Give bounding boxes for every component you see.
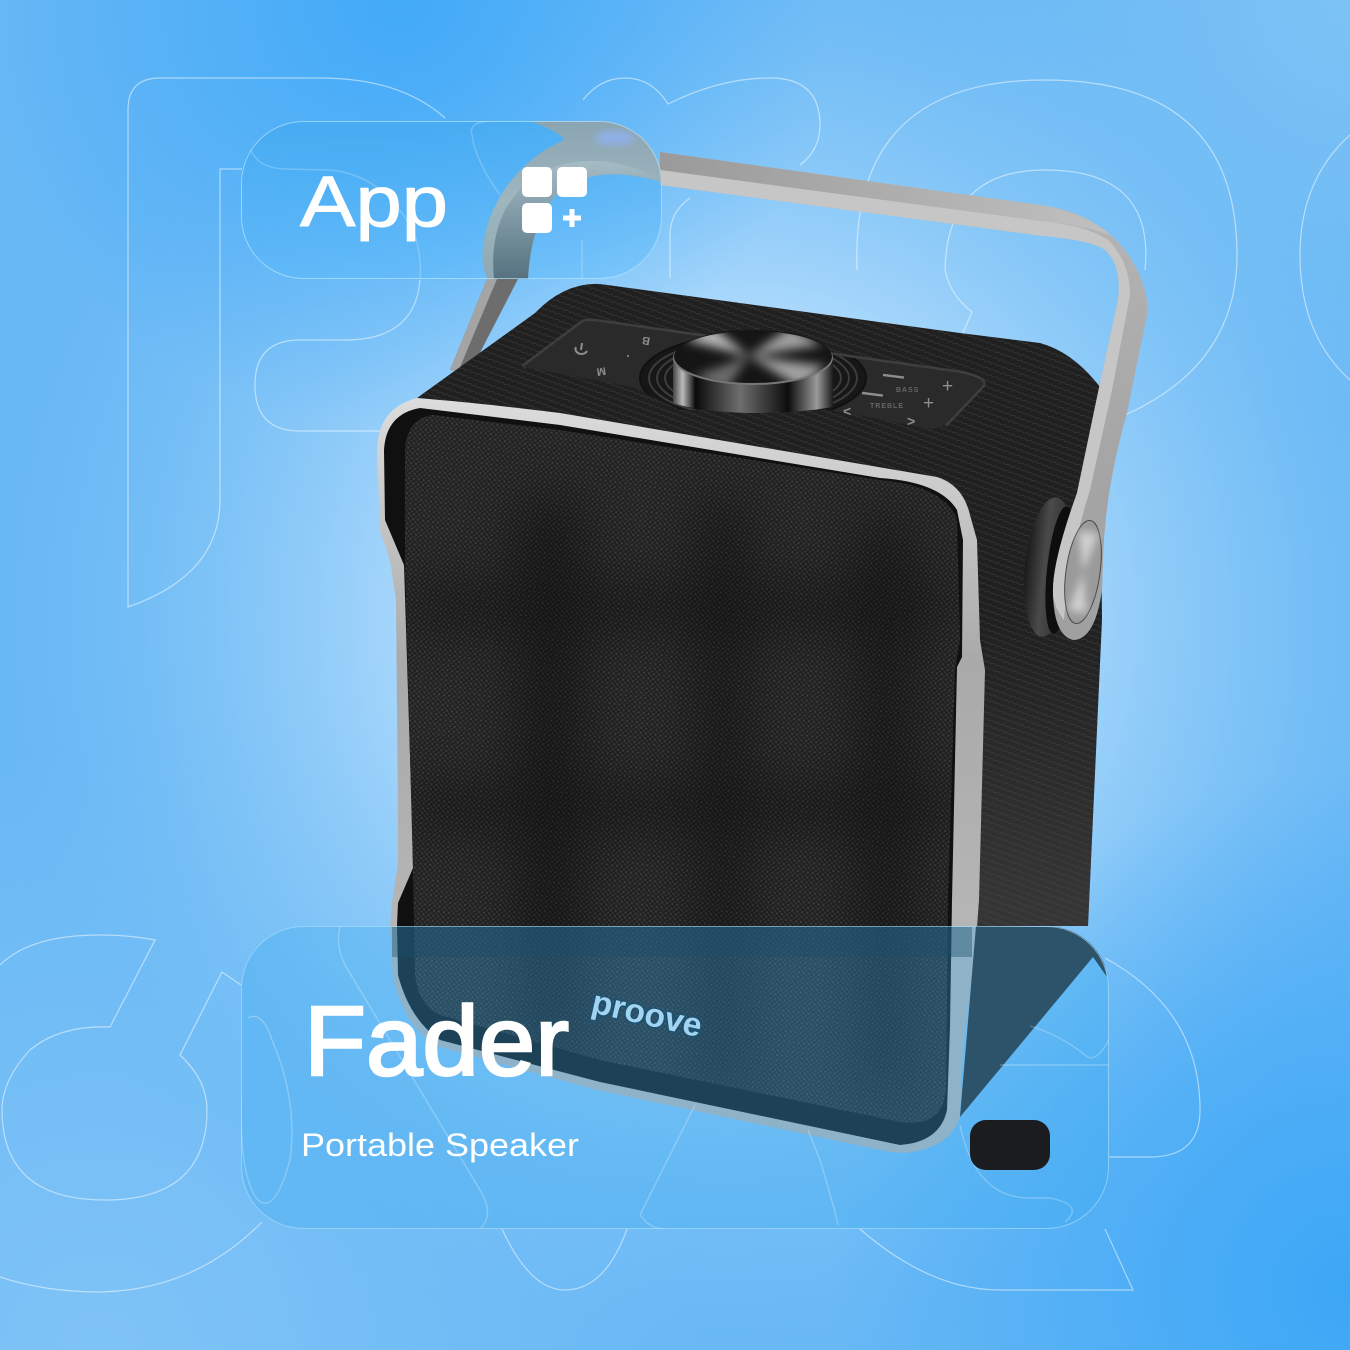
front metal frame: [377, 398, 985, 1153]
product: portable speaker: [377, 152, 1147, 1153]
side hinge knob: [1018, 495, 1080, 639]
app title: App: [300, 163, 448, 242]
control labels: <: [843, 403, 851, 419]
speaker brand logo: proove: [588, 983, 706, 1044]
glass panel: app: [241, 121, 662, 280]
control labels: TREBLE: [870, 403, 904, 410]
control labels: +: [923, 393, 934, 414]
glass panel: product name: [241, 926, 1109, 1229]
icon: app grid with plus: [522, 167, 587, 233]
outline lettering: bottom row: [0, 935, 1200, 1292]
refracted side of speaker: [960, 926, 1107, 1117]
control labels: >: [907, 413, 915, 429]
product category: Portable Speaker: [301, 1127, 579, 1163]
speaker handle: [660, 152, 1147, 640]
speaker mesh grille: [405, 415, 960, 1123]
hinge disc: [1059, 518, 1107, 626]
control labels: [575, 334, 953, 429]
black badge: [970, 1120, 1050, 1170]
control labels: +: [942, 376, 953, 397]
control panel: [523, 321, 983, 429]
rear handle prong: [450, 279, 518, 372]
product name: Fader: [304, 986, 569, 1096]
knob: [673, 326, 833, 413]
outline lettering: top row: [128, 78, 1350, 607]
refracted handle: [482, 121, 662, 279]
control labels: B: [641, 334, 651, 347]
control labels: M: [596, 364, 607, 377]
speaker body leather: [400, 284, 1102, 1030]
control labels: BASS: [896, 387, 919, 394]
